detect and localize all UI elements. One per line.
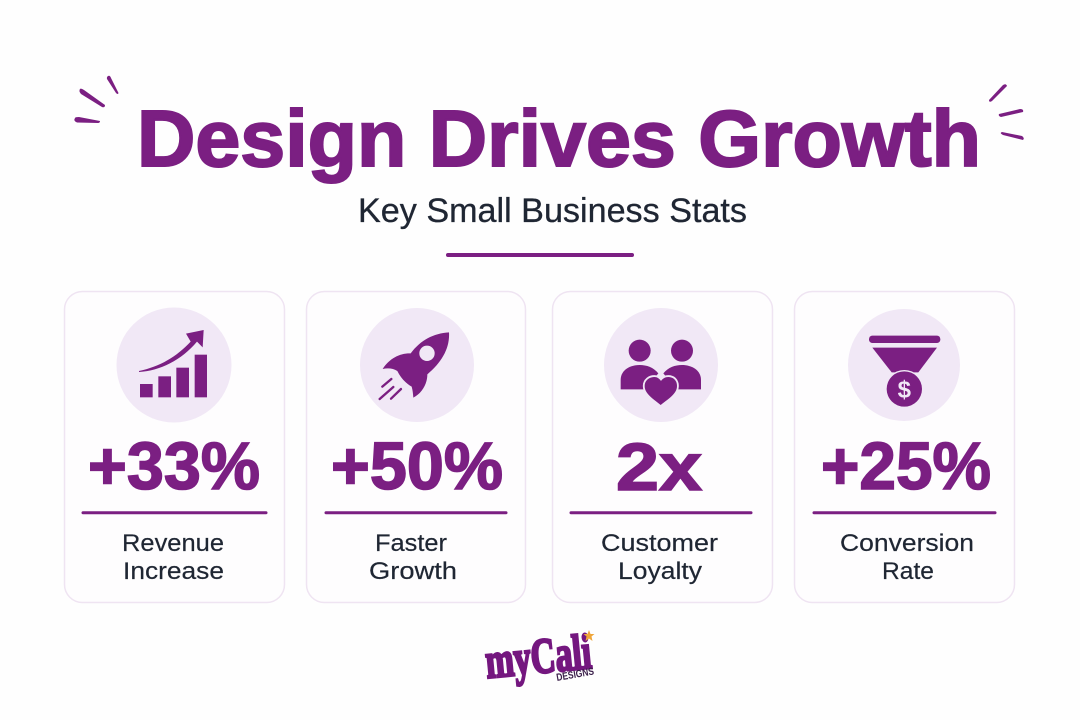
stat: 2x: 2x: [616, 430, 702, 505]
label: conversion rate: [840, 530, 974, 585]
icon: funnel with dollar coin: [869, 336, 940, 407]
panel: faster growth: [306, 292, 526, 602]
stat: +33%: +33%: [88, 429, 260, 504]
icon: two people with heart: [621, 340, 701, 405]
panel: conversion rate: [794, 292, 1014, 602]
label: customer loyalty: [601, 530, 718, 585]
title: Design Drives Growth: [137, 94, 981, 183]
icon: left sparkle accents: [74, 76, 118, 123]
icon: rising bar chart with arrow: [139, 330, 207, 397]
icon: rocket: [380, 332, 449, 399]
stat: +50%: +50%: [331, 429, 503, 504]
logo: myCali Designs: [483, 623, 595, 689]
label: revenue increase: [122, 530, 224, 585]
panel: revenue increase: [64, 292, 284, 602]
logo: myCali Designs: myCali: [483, 623, 594, 689]
stat: +25%: +25%: [821, 429, 991, 504]
label: conversion rate: Rate: [882, 558, 934, 585]
panel: customer loyalty: [552, 292, 772, 602]
label: faster growth: [369, 530, 457, 585]
logo star: [584, 630, 594, 641]
label: customer loyalty: Customer: [601, 530, 718, 557]
logo: myCali Designs: DESIGNS: [555, 666, 595, 684]
icon: right sparkle accents: [989, 84, 1024, 140]
label: faster growth: Growth: [369, 558, 457, 585]
label: conversion rate: Conversion: [840, 530, 974, 557]
subtitle: Key Small Business Stats: [358, 192, 747, 230]
label: revenue increase: Revenue: [122, 530, 224, 557]
header underline: [448, 253, 632, 257]
label: customer loyalty: Loyalty: [618, 558, 702, 585]
label: revenue increase: Increase: [123, 558, 224, 585]
icon: funnel with dollar coin: $: [898, 377, 911, 404]
label: faster growth: Faster: [375, 530, 447, 557]
